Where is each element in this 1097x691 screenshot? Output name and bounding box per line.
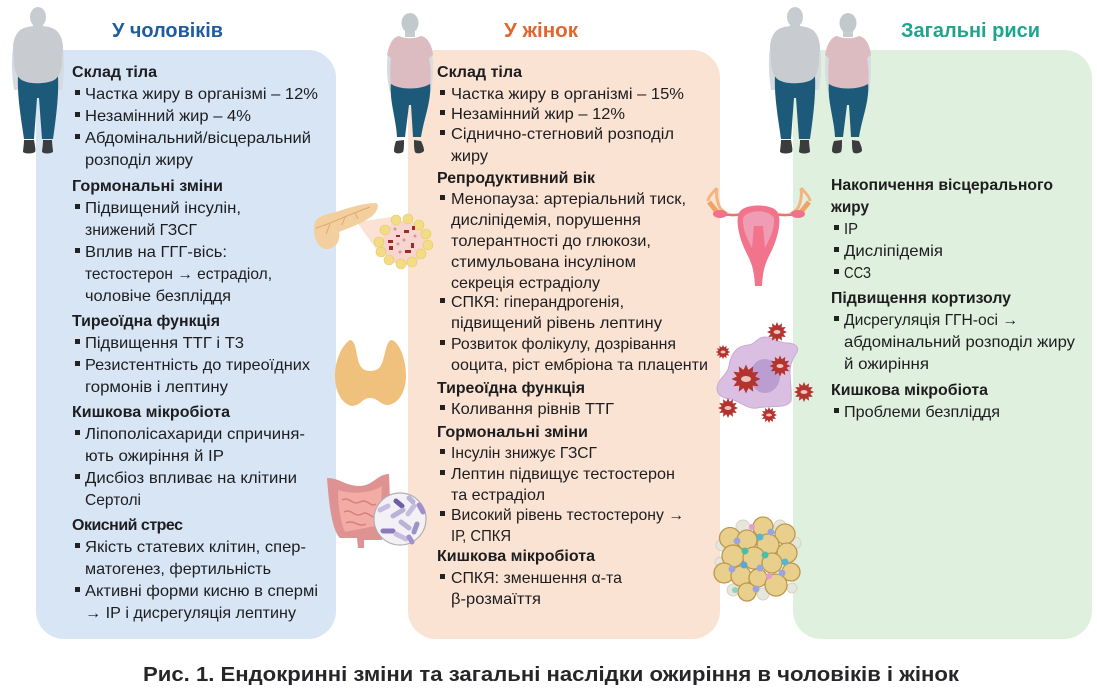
section: oxidative stress, men: матогенез, фертильність: [85, 561, 271, 578]
section: gut microbiota, men: Ліпополісахариди спричиня-: [85, 426, 305, 443]
panel: women: [408, 50, 720, 639]
panel background: women: [408, 50, 720, 639]
section: reproductive age: дисліпідемія, порушення: [451, 212, 641, 229]
section: hormonal changes, men: Вплив на ГГГ-вісь:: [85, 244, 227, 261]
section: reproductive age: Менопауза: артеріальний тиск,: [451, 191, 686, 208]
section: hormonal changes, women: Високий рівень тестостерону →: [451, 507, 684, 524]
section: thyroid function, women: Коливання рівнів ТТГ: [451, 401, 614, 418]
panel: common features: [793, 50, 1092, 639]
section: thyroid function, men: Резистентність до тиреоїдних: [85, 357, 310, 374]
section: reproductive age: секреція естрадіолу: [451, 275, 600, 292]
section: reproductive age: ооцита, ріст ембріона та плаценти: [451, 357, 708, 374]
section: oxidative stress, men: Якість статевих клітин, спер-: [85, 539, 306, 556]
section: elevated cortisol: Дисрегуляція ГГН-осі →: [844, 312, 1018, 329]
icon: cell with reactive oxygen species: [716, 322, 814, 423]
section: elevated cortisol: абдомінальний розподіл жиру: [844, 334, 1075, 351]
heading: women: У жінок: [504, 20, 579, 42]
section: body composition, men: розподіл жиру: [85, 152, 193, 169]
section: hormonal changes, women: Інсулін знижує ГЗСГ: [451, 445, 597, 462]
section: body composition, women: жиру: [451, 148, 488, 165]
section: hormonal changes, men: тестостерон → естрадіол,: [85, 266, 272, 283]
section: gut microbiota, men: Сертолі: [85, 492, 141, 509]
section: thyroid function, men: [72, 313, 310, 396]
section: reproductive age: толерантності до глюкози,: [451, 233, 651, 250]
section: reproductive age: [437, 170, 708, 374]
section: hormonal changes, men: знижений ГЗСГ: [85, 222, 197, 239]
panel background: men: [36, 50, 336, 639]
section: gut microbiota, women: β-розмаїття: [451, 591, 541, 608]
section: visceral fat accumulation: жиру: [830, 199, 869, 216]
section: elevated cortisol: [831, 290, 1075, 373]
section: gut microbiota, common: Проблеми безпліддя: [844, 404, 1000, 421]
section: body composition, women: [437, 64, 684, 165]
section: reproductive age: Репродуктивний вік: [437, 170, 596, 187]
icon: adipocyte cluster: [714, 517, 801, 601]
panel: men: [36, 50, 336, 639]
figure caption: Рис. 1. Ендокринні зміни та загальні наслідки ожиріння в чоловіків і жінок: [143, 664, 960, 686]
section: thyroid function, men: гормонів і лептину: [85, 379, 228, 396]
section: oxidative stress, men: [72, 517, 318, 622]
icon: pancreas with islet: [314, 203, 433, 269]
section: gut microbiota, men: [72, 404, 305, 509]
section: gut microbiota, common: [831, 382, 1000, 421]
icon: man and woman figures: [769, 7, 871, 154]
section: gut microbiota, men: ють ожиріння й ІР: [85, 448, 224, 465]
section: visceral fat accumulation: [830, 177, 1053, 282]
section: body composition, men: [72, 64, 318, 169]
section: gut microbiota, men: Кишкова мікробіота: [72, 404, 230, 421]
section: gut microbiota, women: СПКЯ: зменшення α-та: [451, 570, 622, 587]
section: gut microbiota, women: Кишкова мікробіота: [437, 548, 595, 565]
section: reproductive age: підвищений рівень лептину: [451, 315, 662, 332]
icon: man figure: [12, 7, 64, 154]
section: oxidative stress, men: Окисний стрес: [72, 517, 183, 534]
section: visceral fat accumulation: Накопичення вісцерального: [831, 177, 1053, 194]
section: hormonal changes, men: чоловіче безпліддя: [85, 288, 231, 305]
section: body composition, men: Незамінний жир – 4%: [85, 108, 251, 125]
section: hormonal changes, men: [72, 178, 272, 305]
section: hormonal changes, women: Лептин підвищує тестостерон: [451, 466, 675, 483]
section: body composition, men: Частка жиру в організмі – 12%: [85, 86, 318, 103]
section: reproductive age: СПКЯ: гіперандрогенія,: [451, 294, 624, 311]
section: elevated cortisol: й ожиріння: [844, 356, 929, 373]
section: gut microbiota, women: [437, 548, 622, 608]
section: body composition, women: Склад тіла: [437, 64, 522, 81]
section: body composition, men: Абдомінальний/вісцеральний: [85, 130, 311, 147]
panel background: common: [793, 50, 1092, 639]
section: body composition, women: Частка жиру в організмі – 15%: [451, 86, 684, 103]
section: gut microbiota, common: Кишкова мікробіота: [831, 382, 988, 399]
heading: common features: Загальні риси: [901, 20, 1040, 42]
section: thyroid function, men: Підвищення ТТГ і Т3: [85, 335, 244, 352]
section: visceral fat accumulation: ІР: [844, 221, 858, 238]
section: hormonal changes, men: Гормональні зміни: [72, 178, 223, 195]
section: oxidative stress, men: Активні форми кисню в спермі: [85, 583, 318, 600]
section: hormonal changes, women: Гормональні зміни: [437, 424, 588, 441]
section: hormonal changes, women: [437, 424, 684, 545]
section: reproductive age: стимульована інсуліном: [451, 254, 636, 271]
icon: woman figure: [387, 13, 433, 153]
icon: thyroid gland: [335, 340, 406, 406]
section: hormonal changes, women: та естрадіол: [451, 487, 545, 504]
section: oxidative stress, men: → ІР і дисрегуляція лептину: [85, 605, 296, 622]
section: hormonal changes, women: ІР, СПКЯ: [451, 528, 511, 545]
section: visceral fat accumulation: Дисліпідемія: [844, 243, 943, 260]
section: hormonal changes, men: Підвищений інсулін,: [85, 200, 241, 217]
icon: intestine with bacteria: [327, 474, 426, 548]
section: reproductive age: Розвиток фолікулу, дозрівання: [451, 336, 676, 353]
icon: uterus: [708, 188, 810, 286]
section: thyroid function, women: [437, 380, 614, 418]
heading: men: У чоловіків: [112, 20, 223, 42]
section: body composition, men: Склад тіла: [72, 64, 157, 81]
section: thyroid function, men: Тиреоїдна функція: [72, 313, 220, 330]
section: body composition, women: Сіднично-стегновий розподіл: [451, 126, 674, 143]
section: elevated cortisol: Підвищення кортизолу: [831, 290, 1011, 307]
section: gut microbiota, men: Дисбіоз впливає на клітини: [85, 470, 297, 487]
section: body composition, women: Незамінний жир – 12%: [451, 106, 625, 123]
section: visceral fat accumulation: ССЗ: [844, 265, 871, 282]
section: thyroid function, women: Тиреоїдна функція: [437, 380, 585, 397]
